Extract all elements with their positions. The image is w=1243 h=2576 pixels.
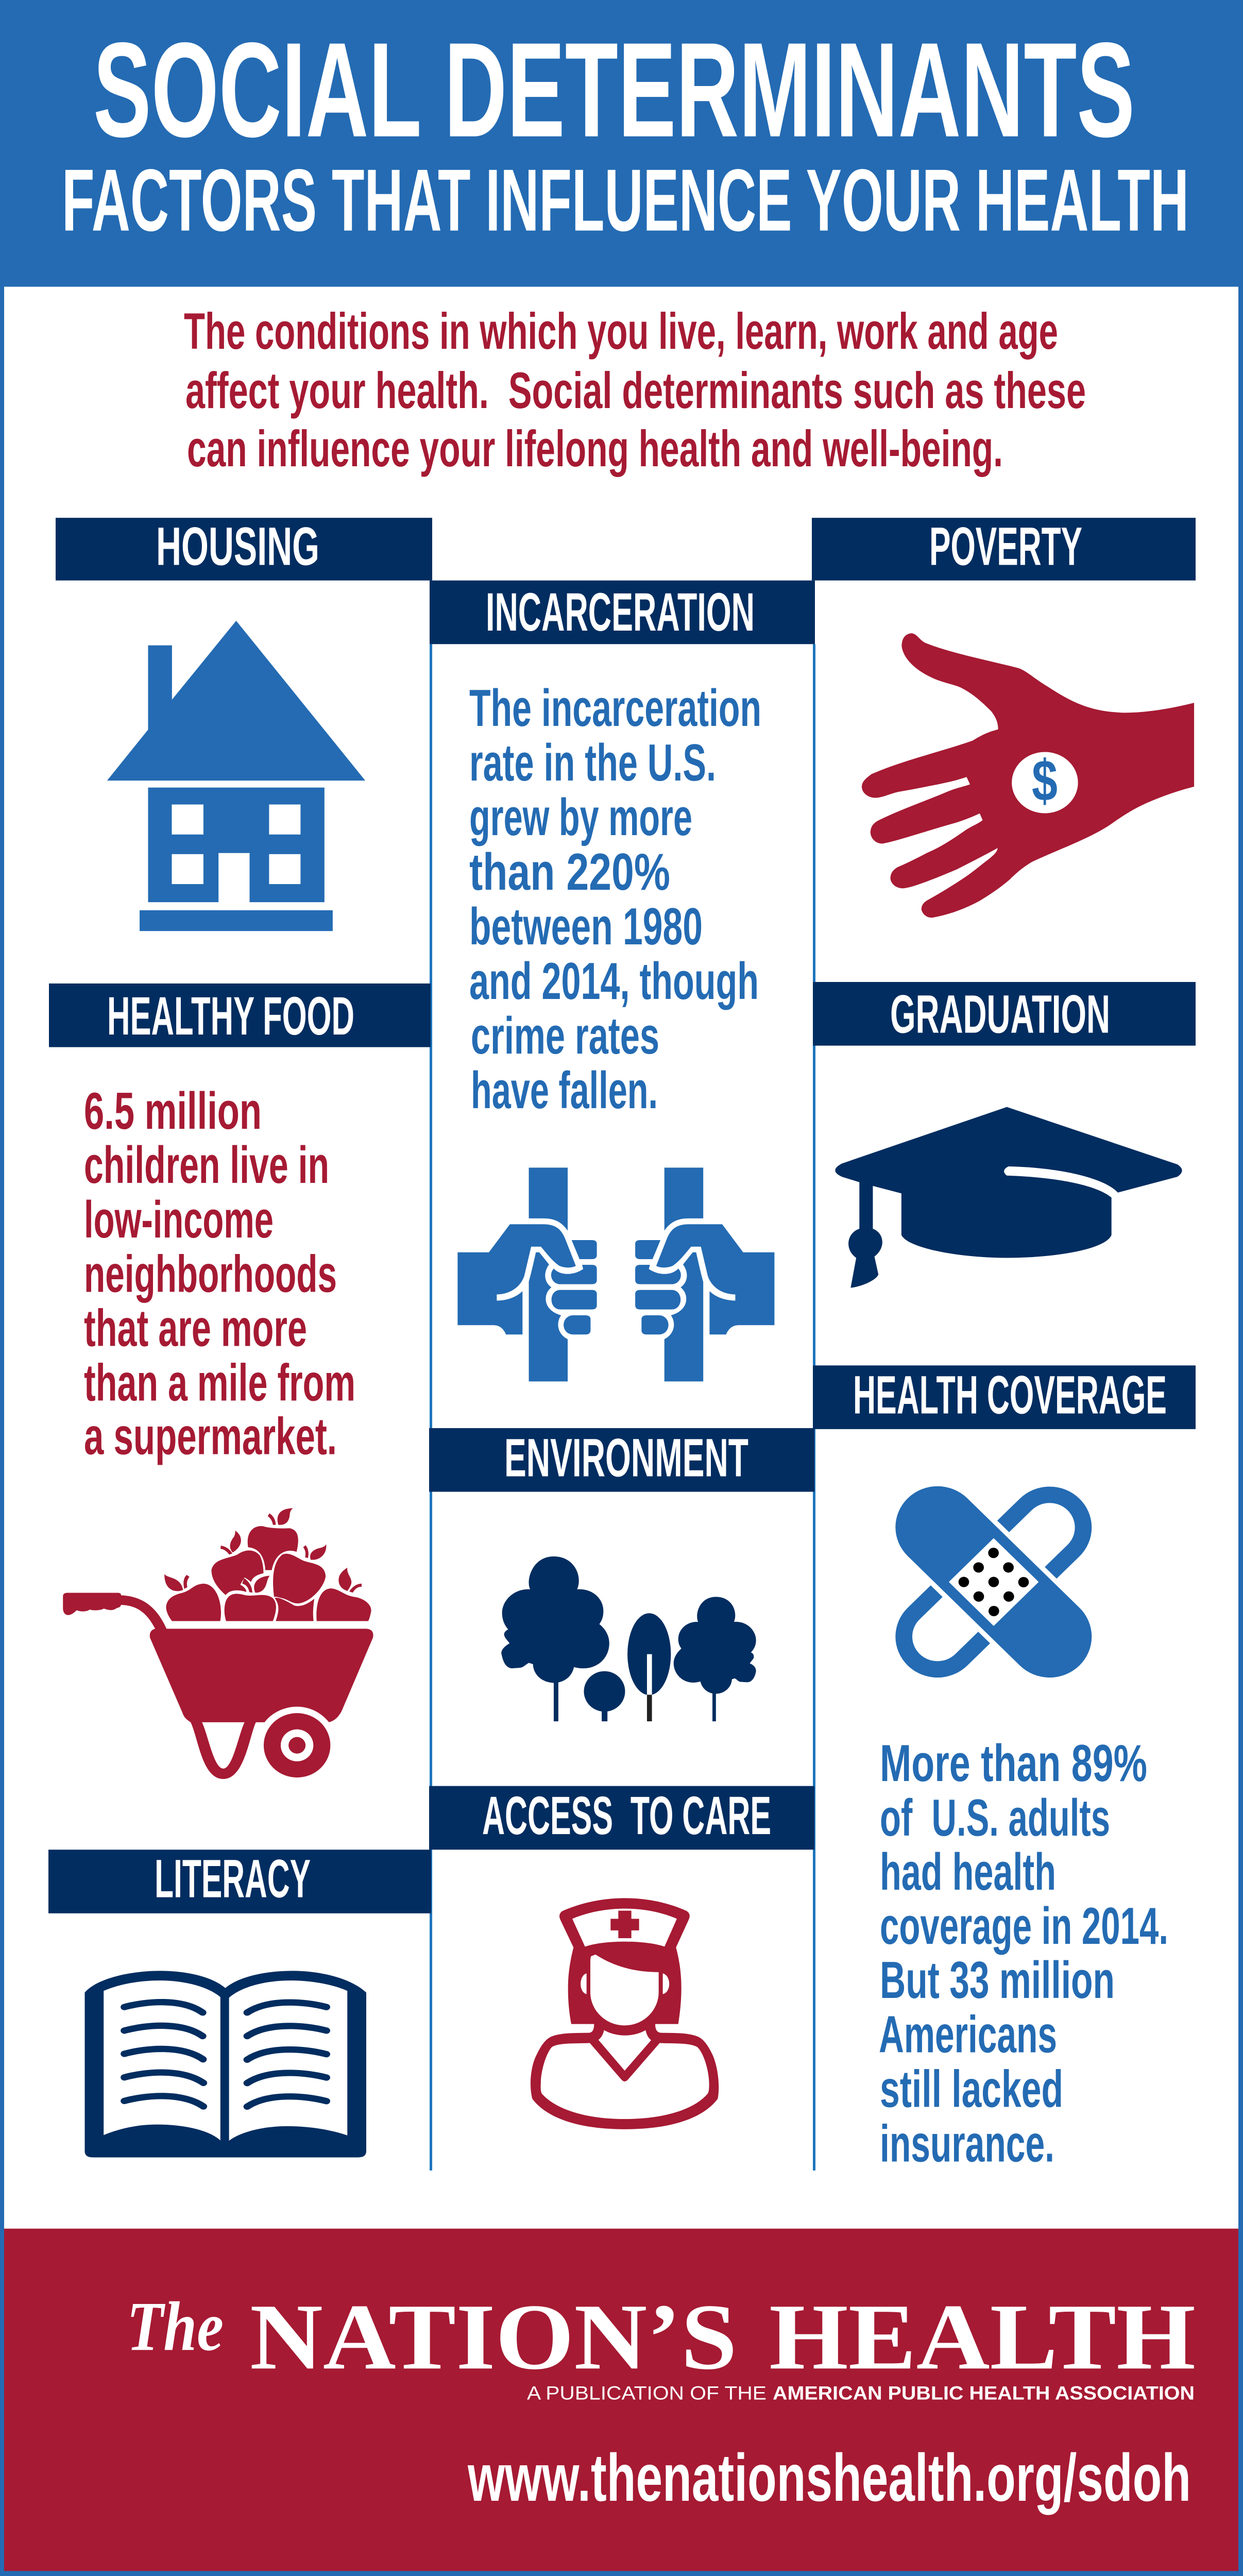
icon: hands gripping bars: [457, 1167, 774, 1381]
panel: housing: [56, 516, 432, 931]
heading: literacy: LITERACY: [155, 1849, 311, 1909]
panel: access to care: [429, 1785, 814, 2129]
heading: access to care: ACCESS TO CARE: [482, 1785, 771, 1846]
text: health coverage statistic: of U.S. adults: [880, 1788, 1110, 1847]
panel: health coverage: [813, 1365, 1196, 2173]
logo: The Nation's Health: The: [127, 2287, 224, 2365]
icon: hand with dollar: [862, 633, 1194, 918]
icon: open book: [84, 1971, 366, 2158]
text: incarceration statistic: grew by more: [469, 788, 692, 846]
footer banner: [4, 2229, 1238, 2571]
icon: crossed bandages: [938, 1527, 1050, 1637]
heading: poverty: POVERTY: [929, 516, 1082, 577]
panel: incarceration: [430, 581, 815, 1381]
panel: literacy: [48, 1849, 431, 2158]
icon: wheelbarrow of apples: [63, 1508, 373, 1779]
heading: access to care: [429, 1785, 814, 1850]
heading: environment: [429, 1428, 814, 1492]
logo: The Nation's Health: [127, 2285, 1196, 2389]
heading: housing: [56, 516, 432, 581]
heading: incarceration: [430, 581, 815, 644]
text: incarceration statistic: The incarceration: [469, 679, 761, 737]
text: healthy food statistic: [84, 1081, 355, 1465]
panel: healthy food: [49, 984, 431, 1779]
text: health coverage statistic: still lacked: [880, 2060, 1063, 2118]
text: incarceration statistic: [469, 679, 761, 1120]
icon: house: [107, 621, 365, 931]
text: healthy food statistic: low-income: [84, 1191, 274, 1249]
tagline: A PUBLICATION OF THE: [527, 2382, 767, 2403]
text: incarceration statistic: than 220%: [469, 842, 670, 901]
intro text: [184, 303, 1086, 478]
icon: hand with dollar: $: [1032, 748, 1058, 813]
text: incarceration statistic: between 1980: [469, 897, 703, 956]
panel: environment: [429, 1428, 814, 1721]
text: incarceration statistic: rate in the U.S.: [469, 733, 716, 792]
text: healthy food statistic: children live in: [84, 1136, 329, 1194]
heading: healthy food: [49, 984, 431, 1047]
text: health coverage statistic: Americans: [879, 2005, 1057, 2063]
icon: trees: [501, 1556, 756, 1721]
panel: poverty: [812, 516, 1196, 918]
text: incarceration statistic: and 2014, though: [469, 952, 759, 1010]
heading: poverty: [812, 516, 1196, 581]
text: health coverage statistic: had health: [880, 1842, 1056, 1901]
text: healthy food statistic: than a mile from: [84, 1353, 355, 1412]
heading: incarceration: INCARCERATION: [486, 582, 755, 642]
heading: graduation: [813, 982, 1196, 1046]
text: incarceration statistic: crime rates: [471, 1006, 659, 1065]
heading: healthy food: HEALTHY FOOD: [107, 986, 354, 1046]
text: healthy food statistic: that are more: [84, 1299, 307, 1357]
text: healthy food statistic: neighborhoods: [84, 1245, 337, 1303]
header banner: [0, 0, 1243, 287]
panel: graduation: [813, 982, 1196, 1288]
tagline: AMERICAN PUBLIC HEALTH ASSOCIATION: [773, 2382, 1195, 2403]
logo: The Nation's Health: NATION’S: [250, 2285, 737, 2389]
text: healthy food statistic: 6.5 million: [84, 1081, 262, 1140]
text: health coverage statistic: But 33 million: [880, 1951, 1115, 2009]
tagline: [527, 2382, 1195, 2403]
logo: The Nation's Health: HEALTH: [769, 2285, 1196, 2389]
text: health coverage statistic: insurance.: [880, 2114, 1054, 2173]
text: health coverage statistic: [879, 1734, 1168, 2173]
icon: graduation cap: [835, 1107, 1182, 1288]
heading: literacy: [48, 1849, 431, 1913]
heading: housing: HOUSING: [156, 516, 319, 577]
heading: environment: ENVIRONMENT: [504, 1428, 748, 1488]
text: incarceration statistic: have fallen.: [471, 1061, 658, 1120]
text: healthy food statistic: a supermarket.: [84, 1407, 337, 1465]
icon: nurse: [531, 1898, 719, 2129]
